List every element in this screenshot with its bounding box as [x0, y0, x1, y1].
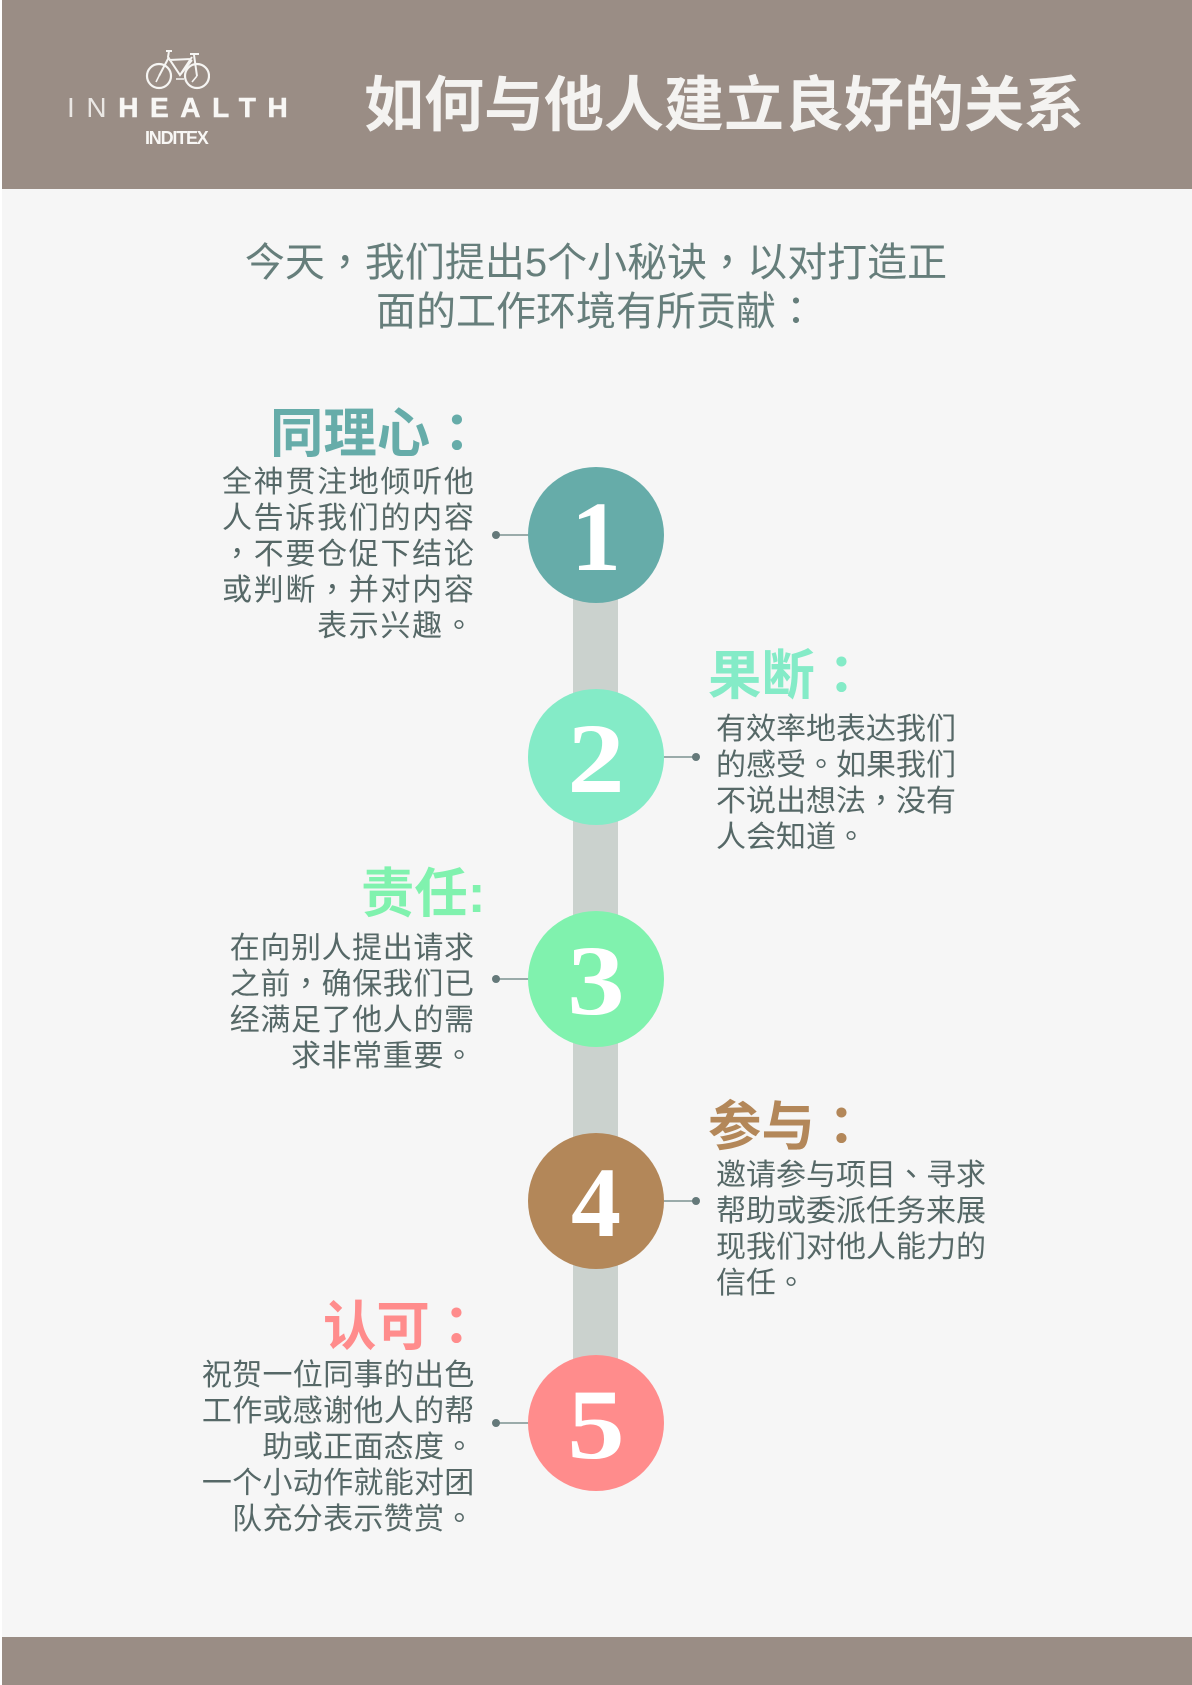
header band: [2, 0, 1192, 189]
number circle 5: [528, 1355, 664, 1491]
wordmark: INHEALTH: [67, 92, 299, 123]
connector: [495, 1422, 529, 1424]
text: 现我们对他人能力的: [716, 1231, 986, 1264]
connector dot: [492, 975, 500, 983]
text: 不说出想法，没有: [716, 776, 956, 820]
company name: INDITEX: [145, 128, 208, 148]
text: 队充分表示赞赏。: [232, 1494, 475, 1538]
step 2: assertiveness: [528, 633, 956, 856]
text: [222, 466, 476, 645]
text: 有效率地表达我们: [716, 713, 956, 746]
text: 的感受。如果我们: [716, 740, 956, 784]
connector: [495, 534, 529, 536]
text: 或判断，并对内容: [222, 565, 476, 609]
text: ，不要仓促下结论: [222, 529, 476, 573]
text: 人会知道。: [716, 812, 866, 856]
number circle 3: [528, 911, 664, 1047]
text: 助或正面态度。: [262, 1422, 475, 1466]
number circle 4: 4: [571, 1147, 621, 1258]
intro text: [245, 230, 947, 336]
text: [716, 713, 956, 856]
text: 人告诉我们的内容: [222, 502, 476, 535]
connector: [664, 1200, 698, 1202]
step 4: participation: [528, 1084, 986, 1302]
text: 一个小动作就能对团: [202, 1467, 475, 1500]
step 5: recognition: [202, 1284, 664, 1538]
intro text: 面的工作环境有所贡献：: [376, 278, 816, 336]
number circle 2: [528, 689, 664, 825]
text: 信任。: [716, 1258, 806, 1302]
heading: 同理心: 同理心：: [270, 391, 484, 468]
footer band: [2, 1637, 1192, 1685]
text: 工作或感谢他人的帮: [202, 1395, 475, 1428]
text: 邀请参与项目、寻求: [716, 1150, 986, 1194]
connector dot: [492, 531, 500, 539]
connector dot: [692, 1197, 700, 1205]
number circle 2: 2: [567, 703, 625, 814]
text: 求非常重要。: [291, 1031, 475, 1075]
text: [230, 932, 475, 1075]
text: 在向别人提出请求: [230, 932, 475, 965]
text: 帮助或委派任务来展: [716, 1195, 986, 1228]
timeline bar: [573, 535, 618, 1423]
intro text: 今天，我们提出5个小秘诀，以对打造正: [245, 230, 947, 288]
heading: 认可: 认可：: [323, 1284, 483, 1361]
heading: 参与: 参与：: [708, 1084, 868, 1161]
logo: InHealth Inditex: [67, 50, 299, 148]
text: 祝贺一位同事的出色: [202, 1359, 475, 1392]
number circle 1: 1: [571, 481, 621, 592]
connector: [495, 978, 529, 980]
text: 全神贯注地倾听他: [222, 466, 476, 499]
text: 之前，确保我们已: [230, 959, 475, 1003]
number circle 4: [528, 1133, 664, 1269]
step 3: responsibility: [230, 865, 664, 1075]
text: 经满足了他人的需: [230, 1004, 475, 1037]
connector dot: [492, 1419, 500, 1427]
connector dot: [692, 753, 700, 761]
number circle 5: 5: [567, 1369, 625, 1480]
heading: 果断: 果断：: [708, 633, 868, 710]
number circle 1: [528, 467, 664, 603]
number circle 3: 3: [567, 925, 625, 1036]
icon: bicycle: [146, 50, 210, 90]
step 1: empathy: [222, 391, 664, 645]
text: 表示兴趣。: [317, 601, 476, 645]
heading: 责任: 责任:: [361, 865, 486, 924]
text: [202, 1359, 475, 1538]
title: 如何与他人建立良好的关系: [364, 72, 1084, 139]
connector: [664, 756, 698, 758]
text: [716, 1150, 986, 1302]
